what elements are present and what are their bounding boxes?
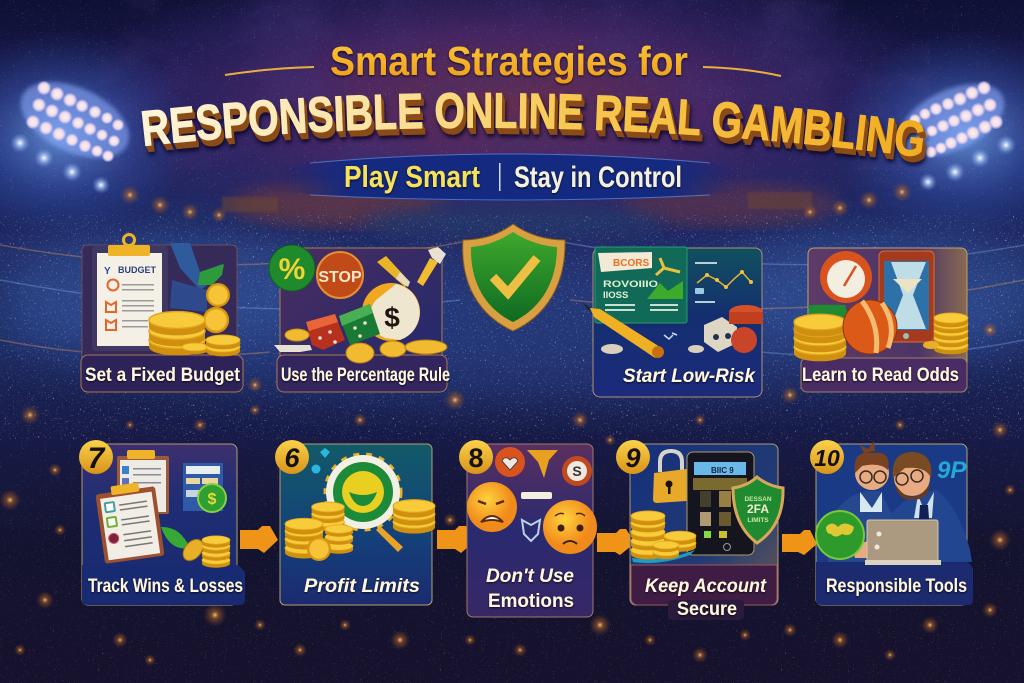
- icon: pencils: [377, 247, 446, 287]
- panel: Responsible Tools: [810, 440, 973, 605]
- icon: large dollar chip: $: [384, 302, 400, 333]
- icon: teal logo: 9P: [937, 457, 967, 484]
- panel: Start Low-Risk: Start Low-Risk: [623, 366, 756, 387]
- icon: target magnifier: [312, 448, 403, 552]
- icon: upset emoji: [467, 482, 517, 532]
- icon: green odds sheet: BCORS: [613, 258, 649, 269]
- icon: 2FA shield: LIMITS: [747, 517, 769, 524]
- subtitle banner: [281, 154, 738, 201]
- panel: Keep Account Secure: [616, 440, 783, 620]
- panel: Track Wins & Losses: Track Wins & Losses: [88, 576, 243, 597]
- label band: set a fixed budget: [81, 355, 243, 392]
- label: keep account secure: Secure: [677, 599, 737, 620]
- panel: Learn to Read Odds: [794, 248, 968, 392]
- icon: coin stacks: [149, 283, 240, 356]
- icon: coin stacks: [285, 500, 435, 561]
- icon: scattered coins: [274, 329, 447, 363]
- icon: green odds sheet: [595, 247, 687, 323]
- arrow: 8 to 9: [597, 529, 635, 555]
- panel: Set a Fixed Budget: [81, 234, 243, 392]
- label band: track wins and losses: [82, 565, 245, 605]
- icon: 2FA shield: [733, 477, 783, 543]
- icon: s badge: [562, 456, 592, 486]
- heading: Smart Strategies for: Smart Strategies for: [330, 38, 688, 84]
- number badge 10: [810, 440, 844, 474]
- label band: read odds: [801, 358, 967, 392]
- icon: stop badge: [317, 252, 363, 298]
- icon: gold lightning: [527, 450, 558, 478]
- icon: heart bubble: [495, 447, 525, 477]
- icon: phone: BIIC 9: [711, 466, 734, 475]
- icon: outlined shield: [522, 520, 540, 541]
- panel: Use the Percentage Rule: Use the Percentage Rule: [281, 365, 450, 386]
- label: don't use emotions: Don't Use: [486, 566, 574, 587]
- number badge 8: [459, 440, 493, 474]
- icon: blue and green arrows: [170, 243, 224, 312]
- panel: Start Low-Risk: [583, 247, 763, 397]
- arrow: 9 to 10: [782, 530, 817, 555]
- icon: coin stack right: [923, 313, 968, 354]
- panel: Track Wins & Losses: [79, 440, 245, 605]
- icon: percent badge: [269, 245, 315, 291]
- label: don't use emotions: [486, 566, 574, 612]
- panel: Responsible Tools: Responsible Tools: [826, 576, 967, 597]
- icon: phone with hourglass: [879, 251, 934, 342]
- icon: orange ball: [843, 300, 897, 354]
- icon: green odds sheet: IIOSS: [603, 290, 628, 301]
- icon: large dollar chip: [362, 283, 420, 341]
- illustration: two men at a laptop: [828, 441, 972, 562]
- number badge 8: 8: [468, 443, 484, 473]
- panel: Set a Fixed Budget: Set a Fixed Budget: [85, 365, 241, 386]
- number badge 7: 7: [88, 442, 106, 475]
- icon: blue form with dollar badge: [183, 463, 226, 512]
- icon: stop badge: STOP: [318, 269, 362, 286]
- label band: percentage rule: [277, 355, 447, 392]
- icon: dice: [306, 304, 380, 350]
- title: Responsible Online Real Gambling: RESPONSIBLE ONLINE REAL GAMBLING: [141, 92, 930, 168]
- icon: green chips: [808, 305, 850, 321]
- icon: s badge: S: [572, 463, 582, 479]
- icon: shield with check: [463, 224, 565, 331]
- icon: pen: [583, 303, 664, 358]
- icon: budget clipboard: BUDGET: [118, 265, 157, 275]
- number badge 10: 10: [814, 445, 840, 471]
- icon: sad emoji: [543, 500, 597, 554]
- number badge 9: [616, 440, 650, 474]
- icon: clock: [820, 251, 872, 303]
- icon: 2FA shield: 2FA: [747, 502, 769, 516]
- subtitle banner: Stay in Control: [514, 161, 682, 194]
- label band: responsible tools: [816, 562, 973, 605]
- icon: back clipboard: [117, 450, 169, 514]
- icon: budget clipboard: [92, 234, 168, 351]
- icon: 2FA shield: DESSAN: [744, 496, 772, 503]
- panel: Profit Limits: Profit Limits: [304, 576, 420, 597]
- panel: Profit Limits: [275, 440, 435, 605]
- icon: laptop: [865, 520, 941, 565]
- white bar: [521, 492, 552, 499]
- icon: percent badge: %: [279, 253, 305, 286]
- panel: Use the Percentage Rule: [269, 245, 450, 392]
- number badge 6: 6: [284, 443, 300, 473]
- label: keep account secure: [645, 576, 767, 620]
- icon: blue form with dollar badge: $: [208, 491, 217, 508]
- label: don't use emotions: Emotions: [488, 591, 574, 612]
- icon: coin stack left: [794, 314, 846, 361]
- icon: padlock: [653, 451, 689, 503]
- icon: phone: [687, 452, 754, 555]
- label band: keep account secure: [631, 565, 777, 620]
- line chart: [695, 262, 753, 303]
- panel: Learn to Read Odds: Learn to Read Odds: [802, 365, 959, 386]
- icon: coin stacks: [631, 511, 696, 563]
- subtitle banner: Play Smart: [344, 159, 480, 194]
- arrow: 6 to 8: [437, 526, 476, 553]
- arrow: 7 to 6: [240, 526, 278, 553]
- icon: leaf and coins: [161, 527, 230, 568]
- icon: green odds sheet: ROVOIIIO: [603, 279, 658, 290]
- icon: dice and chips: [601, 305, 763, 354]
- icon: budget clipboard: Y: [104, 266, 111, 277]
- panel: Don't Use Emotions: [459, 440, 597, 617]
- number badge 7: [79, 440, 113, 475]
- label: keep account secure: Keep Account: [645, 576, 767, 597]
- number badge 9: 9: [625, 443, 641, 473]
- icon: front clipboard: [95, 480, 165, 564]
- number badge 6: [275, 440, 309, 474]
- icon: green badge: [816, 511, 864, 559]
